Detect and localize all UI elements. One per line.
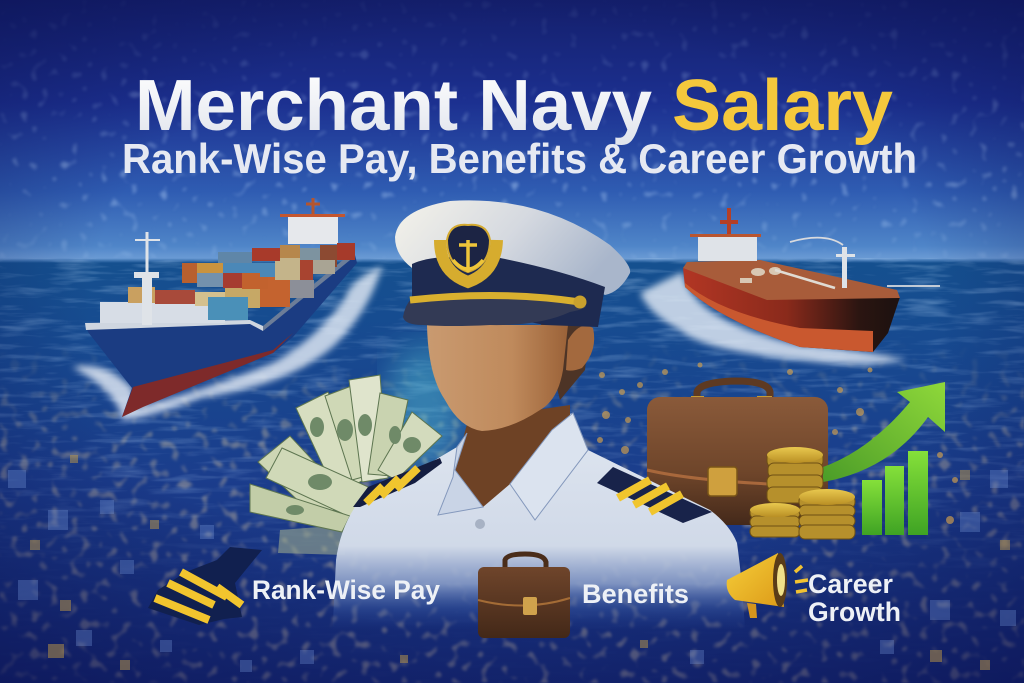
title — [135, 66, 893, 146]
benefits legend — [478, 554, 689, 638]
bridge — [288, 217, 338, 244]
career growth legend — [727, 553, 901, 627]
right epaulette — [597, 467, 712, 523]
cap top — [395, 200, 630, 295]
button — [475, 519, 485, 529]
left epaulette — [353, 458, 442, 507]
officer figure — [330, 200, 747, 683]
scattered pixel squares — [8, 362, 1016, 672]
subtitle: Rank-Wise Pay, Benefits & Career Growth — [122, 135, 917, 182]
face — [427, 325, 568, 431]
cap badge — [440, 225, 497, 282]
gold coins — [750, 447, 855, 539]
cap visor — [403, 296, 586, 326]
ear — [566, 326, 594, 371]
money fan — [250, 375, 442, 555]
container ship — [72, 198, 382, 420]
title: Merchant Navy — [135, 66, 652, 146]
collar — [438, 413, 588, 520]
neck — [455, 405, 570, 507]
title: Salary — [672, 66, 893, 146]
icon: epaulette — [148, 547, 262, 625]
mast — [134, 232, 160, 325]
cap band — [412, 257, 605, 327]
icon: briefcase — [478, 554, 570, 638]
benefits legend: Benefits — [582, 579, 689, 609]
head side and hair — [540, 320, 590, 400]
icon: megaphone — [727, 553, 808, 618]
career growth legend: Growth — [808, 597, 901, 627]
growth chart with arrow — [823, 382, 945, 535]
large briefcase — [647, 381, 828, 525]
career growth legend: Career — [808, 569, 893, 599]
rank-wise pay legend: Rank-Wise Pay — [252, 575, 440, 605]
rank-wise pay legend — [148, 547, 440, 625]
containers — [128, 243, 355, 308]
shirt — [330, 413, 747, 683]
gold braid — [410, 295, 580, 302]
tanker ship — [640, 208, 940, 364]
